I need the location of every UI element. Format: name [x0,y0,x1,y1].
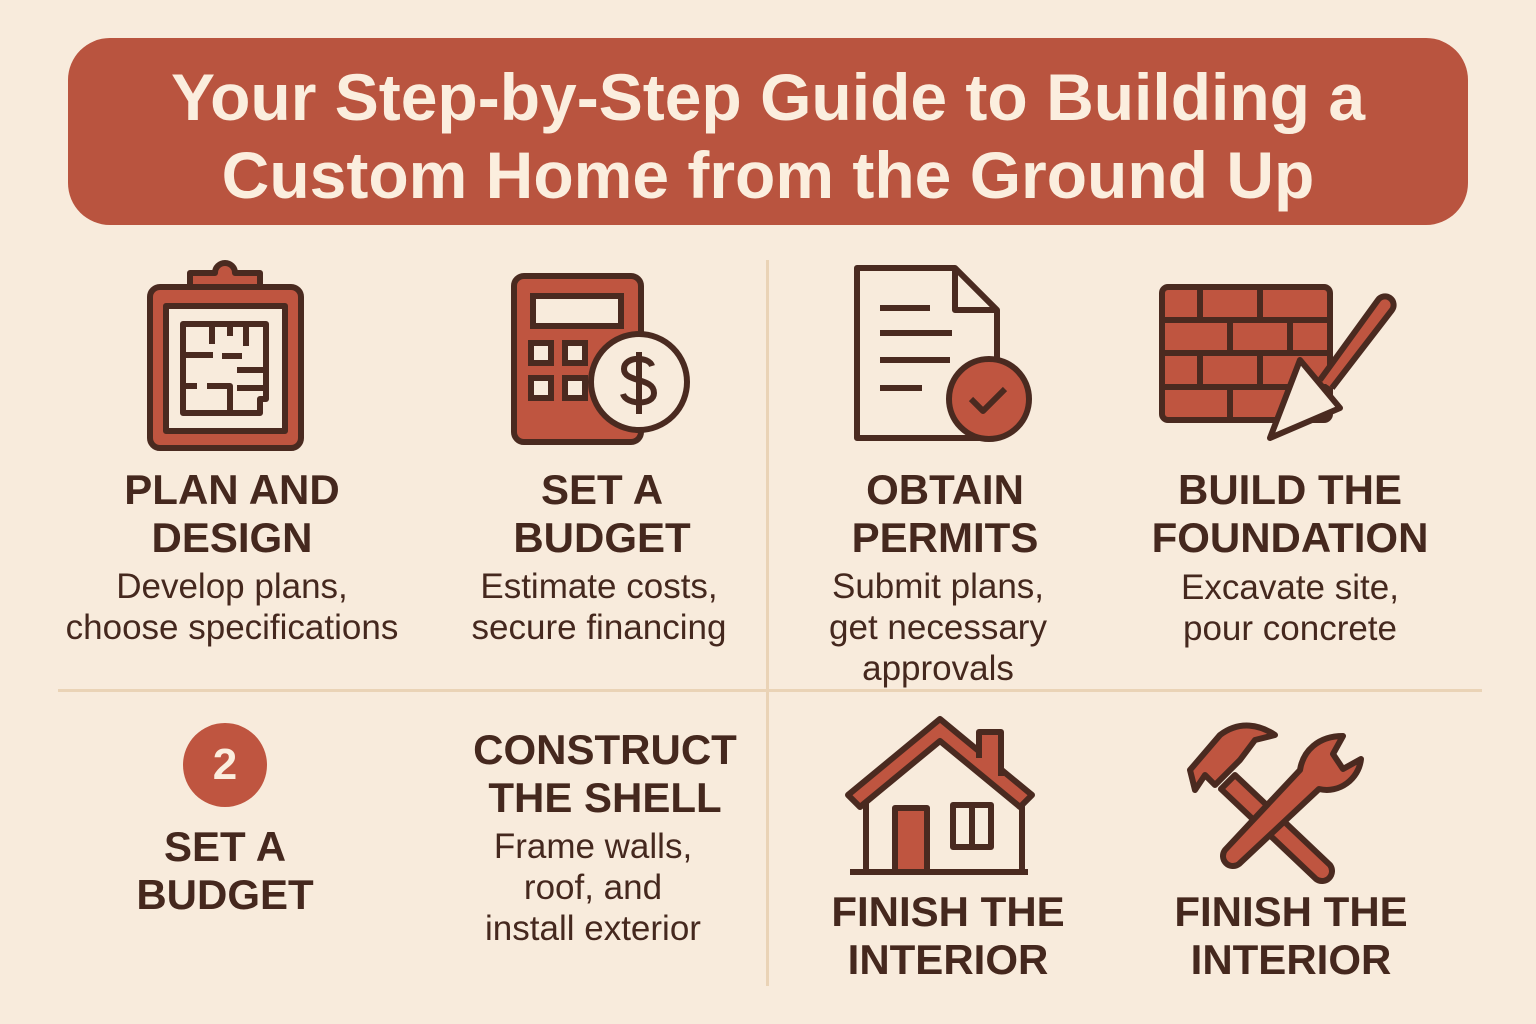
heading [831,888,1065,983]
heading [852,466,1038,561]
step: plan and design [66,466,398,647]
heading [136,823,314,918]
heading [1174,888,1408,983]
description [472,567,726,647]
heading: SET A [541,466,663,513]
step: set a budget [472,466,726,647]
number badge [183,723,267,807]
heading: BUDGET [136,871,314,918]
heading [473,726,737,821]
icon: hammer and wrench [1187,722,1364,884]
heading [1152,466,1428,561]
step: obtain permits [829,466,1047,688]
number badge: 2 [213,740,237,789]
description: Frame walls, [494,827,692,866]
heading: FOUNDATION [1152,514,1428,561]
description: install exterior [485,909,701,948]
heading: FINISH THE [831,888,1065,935]
heading: INTERIOR [848,936,1048,983]
description: pour concrete [1183,609,1397,648]
description: approvals [862,649,1014,688]
icon: house [845,716,1035,875]
heading: PLAN AND [124,466,340,513]
step: build the foundation [1152,466,1428,648]
title banner [68,38,1468,225]
step: finish the interior (house) [831,888,1065,983]
heading [513,466,691,561]
heading: FINISH THE [1174,888,1408,935]
step: construct the shell [473,726,737,948]
description: Develop plans, [116,567,348,606]
title banner: Your Step-by-Step Guide to Building a [171,60,1365,134]
step: number 2 set a budget [136,723,314,918]
description [66,567,398,647]
heading: INTERIOR [1191,936,1391,983]
heading: DESIGN [151,514,313,561]
description: get necessary [829,608,1047,647]
description: secure financing [472,608,726,647]
description: Excavate site, [1181,568,1399,607]
heading: PERMITS [852,514,1038,561]
heading: BUDGET [513,514,691,561]
icon: brick wall and trowel [1159,284,1397,441]
heading: BUILD THE [1178,466,1402,513]
description: Estimate costs, [480,567,718,606]
description: roof, and [524,868,662,907]
heading: SET A [164,823,286,870]
description [1181,568,1399,648]
description [485,827,701,948]
heading [124,466,340,561]
description: Submit plans, [832,567,1044,606]
title banner: Custom Home from the Ground Up [222,138,1314,212]
description: choose specifications [66,608,398,647]
description [829,567,1047,688]
heading: CONSTRUCT [473,726,737,773]
step: finish the interior (tools) [1174,888,1408,983]
heading: OBTAIN [866,466,1024,513]
heading: THE SHELL [488,774,722,821]
icon: document with check [854,265,1032,442]
icon: clipboard floor plan [147,260,304,451]
icon: calculator with dollar [511,273,690,445]
